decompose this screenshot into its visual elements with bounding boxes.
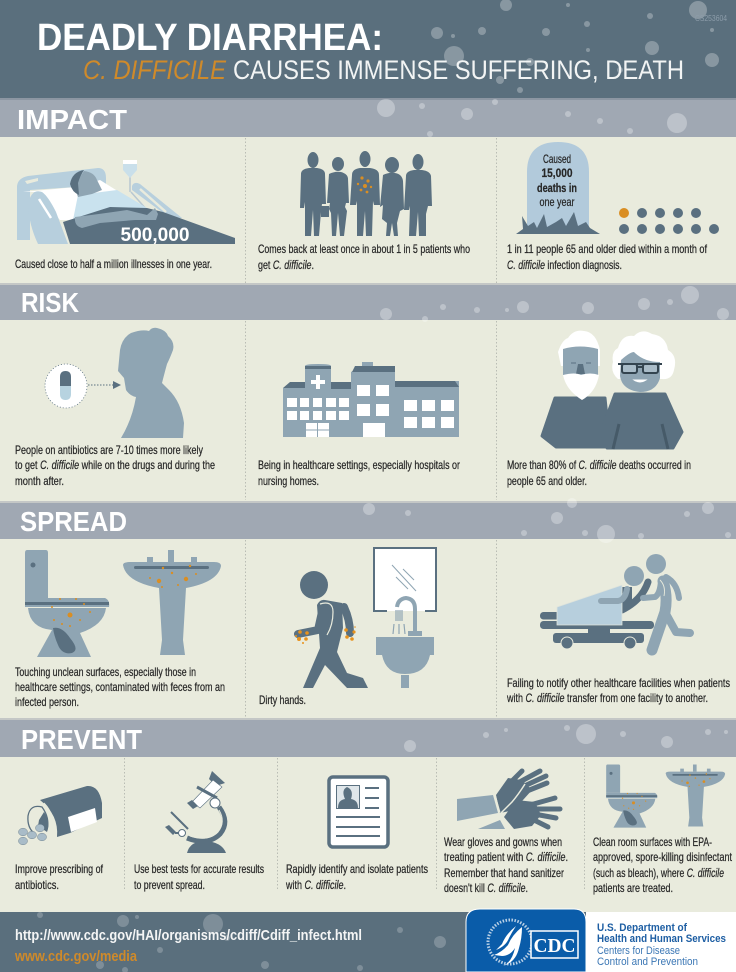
band: prevent [0, 718, 736, 757]
band: impact: IMPACT [17, 104, 127, 135]
text: recurrence: get C. difficile. [258, 258, 314, 272]
title: DEADLY DIARRHEA: [37, 17, 383, 59]
text: surfaces: Touching unclean surfaces, especially those in [15, 665, 196, 679]
icon: hospital building [283, 362, 459, 437]
agency name: Centers for Disease [597, 945, 680, 957]
text: healthcare settings: Being in healthcare settings, especially hospitals or [258, 458, 460, 472]
text: tests: Use best tests for accurate results [134, 862, 264, 876]
text: dirty hands: Dirty hands. [259, 693, 306, 707]
logo: HHS and CDC [466, 909, 586, 972]
text: tests [134, 862, 264, 892]
back glove [496, 771, 547, 813]
text: antibiotics: People on antibiotics are 7-10 times more likely [15, 443, 203, 457]
text: gloves [444, 835, 568, 895]
agency name: U.S. Department of [597, 922, 687, 934]
text: isolate: with C. difficile. [285, 878, 346, 892]
panel: prevent [15, 758, 732, 895]
text: gloves: Remember that hand sanitizer [444, 866, 564, 880]
text: older deaths [507, 242, 707, 272]
text: cleaning: patients are treated. [593, 881, 673, 895]
report code: CS253604 [695, 14, 727, 23]
header bubbles [431, 0, 719, 93]
text: age [507, 458, 691, 488]
icon: toilet and sink with germs [25, 550, 221, 657]
text: healthcare settings: nursing homes. [258, 474, 319, 488]
subtitle: C. DIFFICILE [83, 55, 227, 85]
agency name [597, 922, 726, 968]
icon: tombstone: 15,000 [542, 166, 573, 180]
text: gloves: treating patient with C. difficile. [444, 850, 568, 864]
band: spread [0, 498, 736, 543]
icon: tombstone: Caused [543, 152, 571, 166]
icon: pill bottle [18, 786, 102, 845]
text: isolate: Rapidly identify and isolate patients [286, 862, 428, 876]
text: surfaces: infected person. [15, 695, 79, 709]
band: risk [0, 283, 736, 322]
icon: head silhouette [118, 328, 184, 438]
panel: spread [15, 540, 730, 718]
text: prescribing [15, 862, 103, 892]
icon: microscope [165, 771, 226, 853]
subtitle: CAUSES IMMENSE SUFFERING, DEATH [233, 55, 684, 85]
text: recurrence [258, 242, 470, 272]
text: isolate [285, 862, 428, 892]
url: http://www.cdc.gov/HAI/organisms/cdiff/Cdiff_infect.html [15, 927, 362, 944]
text: tests: to prevent spread. [134, 878, 205, 892]
band: prevent: PREVENT [21, 724, 142, 755]
text: illnesses: Caused close to half a million illnesses in one year. [15, 257, 212, 271]
icon: 1 in 11 dots [619, 208, 719, 234]
icon: tombstone: one year [540, 195, 574, 209]
man [542, 331, 610, 447]
text: surfaces: healthcare settings, contaminated with feces from an [15, 680, 225, 694]
logo: HHS and CDC: CDC [534, 935, 576, 957]
icon: patient in hospital bed: 500,000 [120, 225, 190, 246]
panel: impact [15, 138, 719, 283]
white logo area [586, 912, 736, 972]
icon: small toilet and sink [606, 764, 725, 828]
subtitle [83, 55, 684, 85]
text: age: people 65 and older. [507, 474, 587, 488]
text: gloves: Wear gloves and gowns when [444, 835, 562, 849]
header banner [0, 0, 736, 98]
text: antibiotics: to get C. difficile while on the drugs and during the [15, 458, 215, 472]
text: prescribing: Improve prescribing of [15, 862, 103, 876]
text: cleaning: (such as bleach), where C. difficile [593, 866, 724, 880]
text: cleaning [593, 835, 732, 895]
icon: tombstone: deaths in [537, 181, 577, 195]
text: healthcare settings [258, 458, 460, 488]
icon: five people silhouettes [300, 151, 432, 236]
icon: patient on gurney with nurse [540, 554, 690, 650]
media url: www.cdc.gov/media [14, 948, 138, 965]
agency name: Control and Prevention [597, 956, 698, 968]
icon: elderly couple [542, 331, 682, 449]
band: risk: RISK [21, 287, 79, 318]
text: prescribing: antibiotics. [15, 878, 59, 892]
icon: person with dirty hands [295, 571, 368, 688]
panel: risk [15, 321, 691, 500]
text: surfaces [15, 665, 225, 709]
icon: mirror and sink [374, 548, 436, 688]
band: impact [0, 98, 736, 137]
woman [601, 331, 682, 449]
band: spread: SPREAD [20, 506, 127, 537]
icon: patient in hospital bed [17, 160, 235, 246]
text: recurrence: Comes back at least once in about 1 in 5 patients who [258, 242, 470, 256]
text: older deaths: C. difficile infection diagnosis. [507, 258, 622, 272]
text: gloves: doesn't kill C. difficile. [444, 881, 528, 895]
text: antibiotics [15, 443, 215, 488]
icon: tombstone [516, 142, 600, 234]
icon: antibiotic capsule and arrow [45, 364, 121, 408]
icon: gloved hands [457, 771, 560, 829]
icon: patient record [329, 777, 388, 847]
text: antibiotics: month after. [15, 474, 64, 488]
front glove [504, 787, 560, 829]
footer [0, 909, 736, 972]
text: failure to notify [506, 676, 730, 705]
text: age: More than 80% of C. difficile deaths occurred in [507, 458, 691, 472]
